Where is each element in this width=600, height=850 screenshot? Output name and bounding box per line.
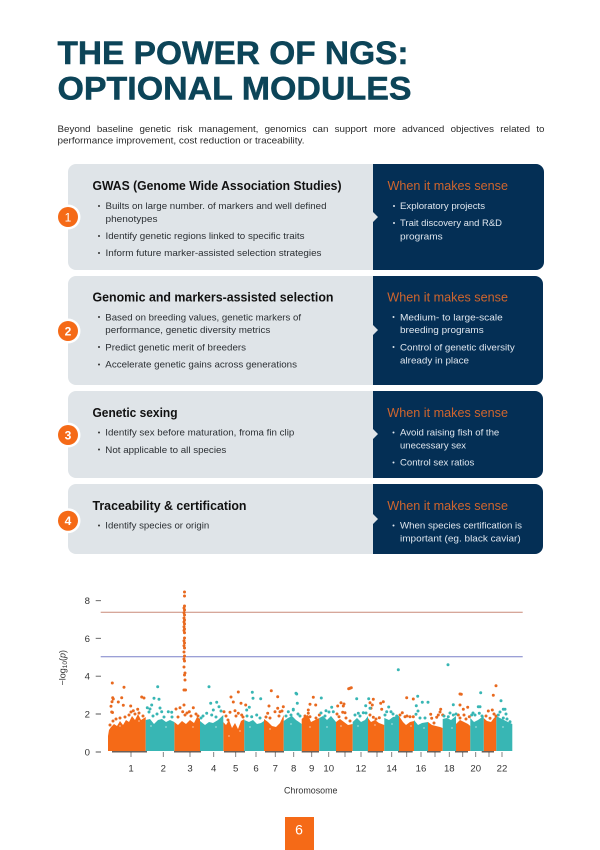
module 4 when it makes sense (387, 498, 522, 544)
intro text: Beyond baseline genetic risk management, genomics can support more advanced objectives related to (58, 123, 544, 134)
module 3 bullets (98, 428, 294, 456)
module 3 when it makes sense: Avoid raising fish of the (400, 428, 499, 439)
module 1 bullets: Inform future marker-assisted selection strategies (106, 248, 322, 259)
x axis with ticks and labels: 18 (444, 764, 455, 775)
module 3 when it makes sense: When it makes sense (387, 405, 508, 420)
y axis with ticks and labels: 2 (85, 710, 90, 720)
page number: 6 (295, 822, 303, 838)
white gaps in masses (120, 721, 503, 736)
number badge 4: 4 (65, 514, 72, 528)
number badge 3: 3 (65, 428, 72, 442)
teal chromosome masses (146, 715, 512, 751)
module 4 heading: Traceability & certification (92, 498, 247, 513)
number badge 4 (56, 508, 80, 533)
module 1 when it makes sense: Trait discovery and R&D (400, 218, 502, 229)
module 2 when it makes sense: Medium- to large-scale (400, 312, 503, 323)
module 3 heading: Genetic sexing (92, 405, 178, 420)
module 2 bullets (98, 312, 301, 371)
module 1 bullets: Identify genetic regions linked to specific traits (106, 231, 305, 242)
number badge 2: 2 (65, 324, 72, 338)
x axis with ticks and labels: 22 (497, 764, 507, 775)
module 2 bullets: Accelerate genetic gains across generations (105, 360, 297, 371)
module 3 when it makes sense (387, 405, 508, 469)
module 2 bullets: Predict genetic merit of breeders (105, 342, 246, 353)
module 4 bullets: Identify species or origin (105, 521, 209, 532)
title: OPTIONAL MODULES (58, 70, 412, 106)
module 1 bullets: Builts on large number. of markers and well defined (106, 201, 326, 212)
module 2 bullets: Based on breeding values, genetic markers of (105, 312, 301, 323)
orange chromosome masses (108, 714, 496, 751)
x axis with ticks and labels: 20 (470, 764, 481, 775)
module 1 bullets (98, 201, 326, 259)
module 2 when it makes sense: breeding programs (400, 325, 484, 336)
module 2 heading: Genomic and markers-assisted selection (92, 290, 334, 305)
intro text (58, 123, 544, 146)
y axis title: 10 (62, 661, 69, 668)
number badge 3 (56, 422, 80, 448)
x axis with ticks and labels: 16 (416, 764, 426, 775)
module 4 when it makes sense: When species certification is (400, 521, 522, 532)
number badge 1 (56, 204, 80, 230)
x axis title: Chromosome (284, 786, 338, 796)
threshold lines (101, 612, 523, 657)
module 4 when it makes sense: When it makes sense (387, 498, 508, 513)
number badge 2 (56, 318, 80, 344)
y axis with ticks and labels: 6 (85, 634, 90, 645)
module 4 when it makes sense: important (eg. black caviar) (400, 533, 521, 544)
x axis with ticks and labels: 9 (309, 764, 314, 775)
module 1 when it makes sense: When it makes sense (388, 178, 508, 193)
panel: module 4 traceability (56, 484, 543, 554)
module 2 when it makes sense: Control of genetic diversity (400, 342, 515, 353)
x axis with ticks and labels (112, 752, 507, 775)
panel: module 3 genetic sexing (56, 391, 543, 478)
panel: module 1 GWAS (56, 164, 544, 270)
y axis title: ( (58, 658, 68, 661)
module 3 when it makes sense: Control sex ratios (400, 458, 475, 469)
title: THE POWER OF NGS: (58, 35, 409, 71)
y axis with ticks and labels: 0 (85, 748, 90, 758)
module 1 when it makes sense (388, 178, 508, 242)
x axis with ticks and labels: 1 (128, 764, 134, 775)
y axis title: p) (58, 650, 68, 658)
orange significance points (110, 592, 496, 725)
teal points (147, 665, 510, 722)
x axis with ticks and labels: 14 (386, 764, 398, 775)
module 2 when it makes sense (387, 290, 515, 366)
module 2 bullets: performance, genetic diversity metrics (105, 325, 271, 336)
x axis with ticks and labels: 4 (211, 764, 217, 775)
x axis with ticks and labels: 7 (273, 764, 278, 775)
title (58, 35, 412, 106)
module 3 bullets: Identify sex before maturation, froma fin clip (105, 428, 294, 439)
y axis title: −log (58, 668, 68, 686)
x axis with ticks and labels: 10 (323, 764, 334, 775)
number badge 1: 1 (65, 210, 72, 224)
x axis with ticks and labels: 12 (356, 764, 366, 775)
panel: module 2 genomic selection (56, 276, 543, 385)
intro text: performance improvement, cost reduction or traceability. (58, 134, 304, 146)
module 2 when it makes sense: When it makes sense (387, 290, 508, 305)
module 3 bullets: Not applicable to all species (105, 445, 227, 456)
y axis with ticks and labels: 8 (85, 596, 90, 607)
y axis with ticks and labels (85, 596, 101, 758)
x axis with ticks and labels: 8 (291, 764, 296, 775)
x axis with ticks and labels: 6 (253, 764, 259, 775)
x axis with ticks and labels: 5 (233, 764, 238, 775)
module 1 when it makes sense: Exploratory projects (400, 201, 485, 212)
chart: Manhattan plot (58, 592, 523, 796)
module 2 when it makes sense: already in place (400, 355, 469, 366)
x axis with ticks and labels: 3 (187, 764, 193, 775)
module 1 when it makes sense: programs (400, 231, 443, 242)
x axis with ticks and labels: 2 (161, 764, 166, 775)
page number (285, 817, 314, 850)
module 1 heading: GWAS (Genome Wide Association Studies) (92, 178, 342, 193)
module 1 bullets: phenotypes (106, 214, 158, 225)
y axis with ticks and labels: 4 (85, 672, 91, 683)
module 3 when it makes sense: unecessary sex (400, 441, 466, 452)
